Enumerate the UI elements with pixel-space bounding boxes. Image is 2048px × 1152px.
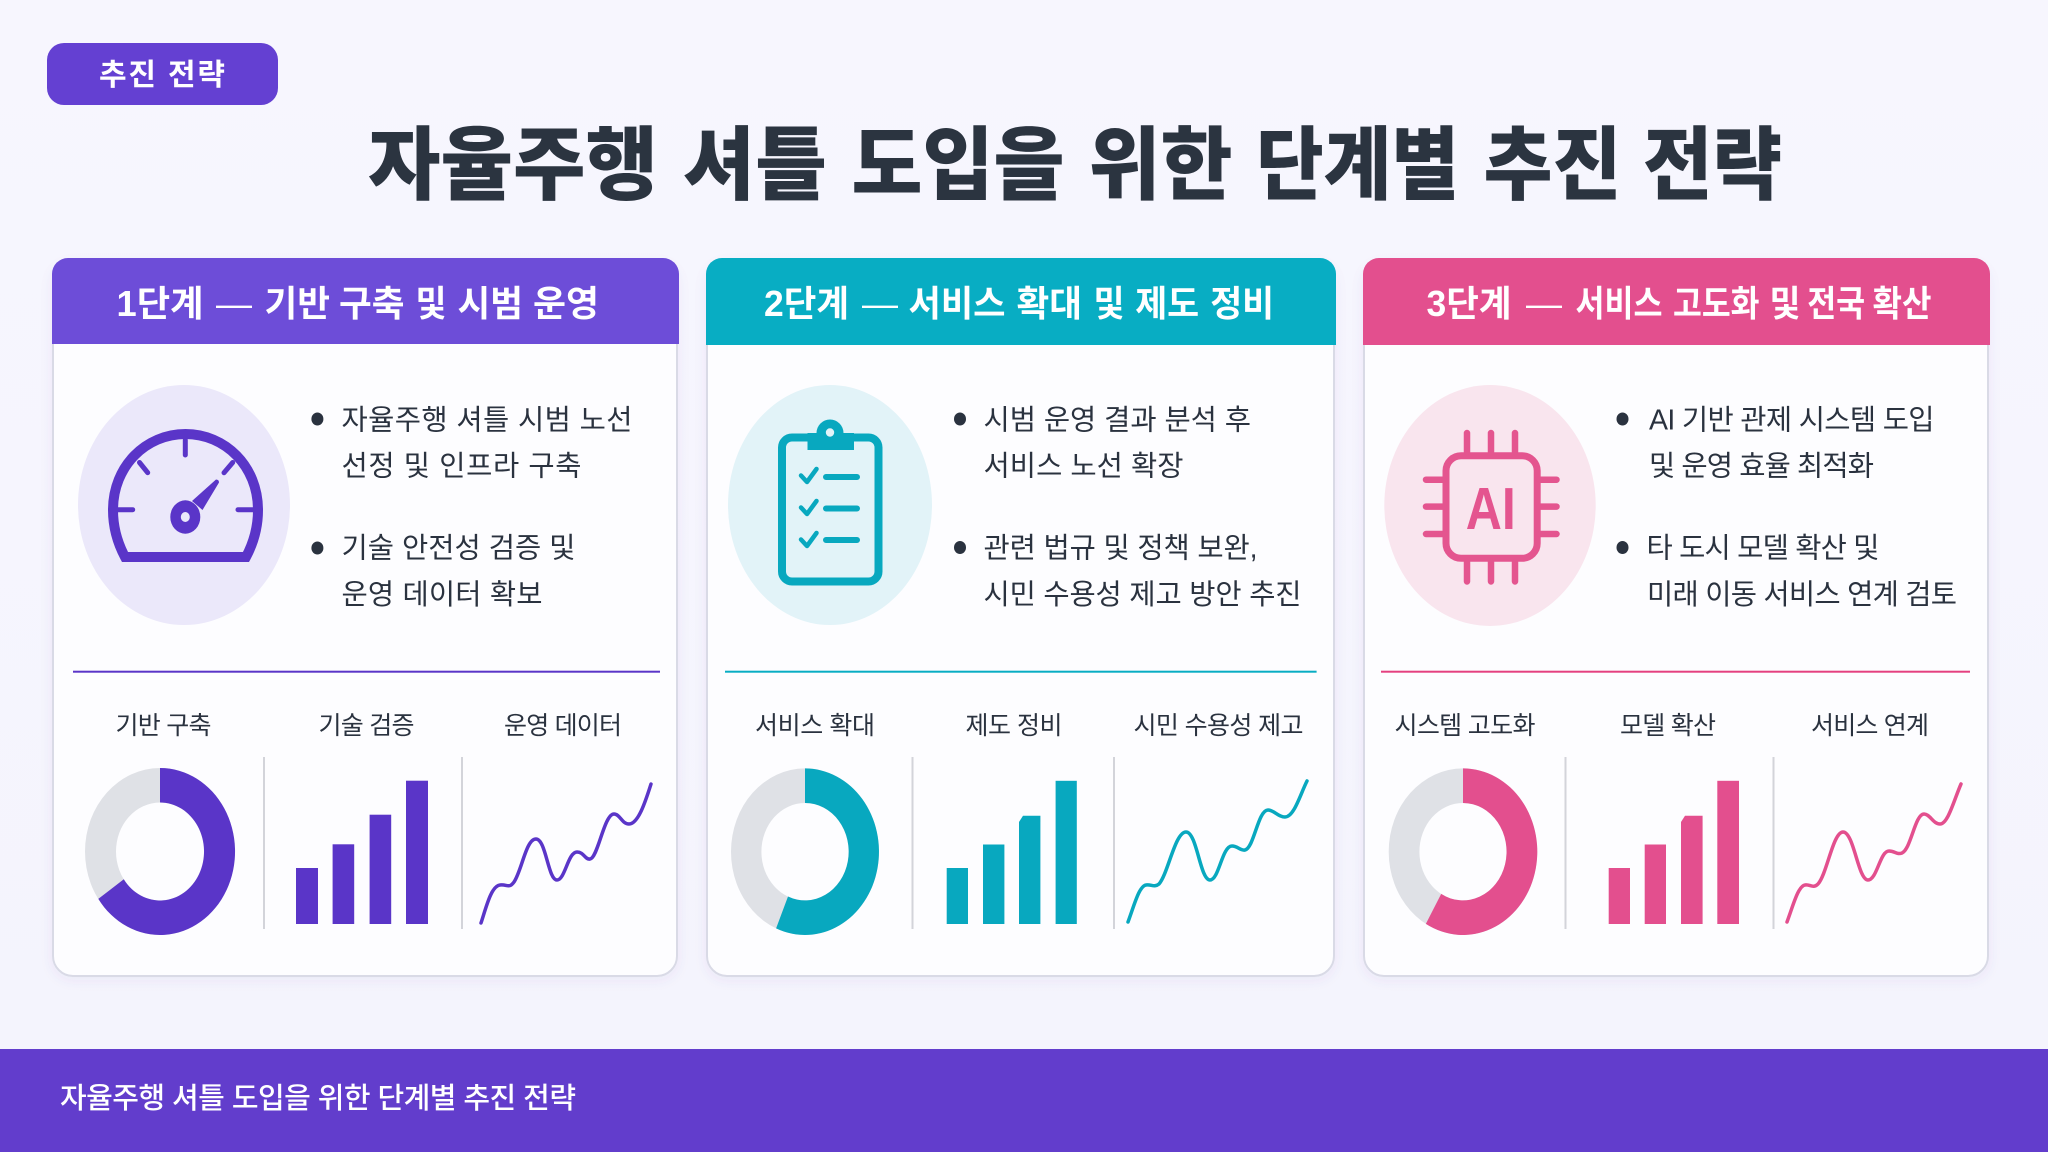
bar chart: 1단계	[296, 781, 428, 924]
chart labels: 2단계: 제도 정비	[966, 712, 1062, 740]
panel header: 2단계: 정비	[1210, 283, 1274, 324]
panel header: 2단계: —	[862, 283, 898, 324]
panel header: 3단계: 확산	[1872, 283, 1932, 324]
chart labels: 2단계: 서비스 확대	[755, 712, 875, 740]
line chart: 3단계	[1787, 784, 1961, 922]
panel header: 2단계: 서비스	[908, 283, 1006, 324]
panel header: 2단계: 확대	[1016, 283, 1082, 324]
panel: 1단계	[52, 258, 679, 976]
chart labels: 1단계: 기반 구축	[116, 712, 212, 740]
chart labels: 2단계	[755, 712, 1304, 740]
panel header: 3단계: 3단계	[1426, 283, 1512, 324]
line chart: 2단계	[1128, 781, 1307, 922]
bullets: 2단계: 시범 운영 결과 분석 후	[984, 404, 1251, 436]
badge: 추진 전략	[47, 43, 278, 105]
bullets: 1단계: 자율주행 셔틀 시범 노선	[342, 404, 632, 436]
bullets: 2단계: 서비스 노선 확장	[984, 450, 1184, 482]
bullets: 3단계: 타 도시 모델 확산 및	[1646, 532, 1880, 564]
panel header: 1단계: —	[216, 283, 252, 324]
bullets: 2단계	[954, 404, 1302, 611]
chart labels: 1단계: 기술 검증	[318, 712, 414, 740]
bullets: 3단계: 미래 이동 서비스 연계 검토	[1647, 579, 1957, 611]
chart labels: 3단계: 서비스 연계	[1811, 712, 1929, 740]
panel header: 2단계: 2단계	[764, 283, 849, 324]
icon: speedometer gauge	[78, 385, 290, 625]
panel: 2단계	[706, 258, 1336, 976]
panel header: 2단계	[706, 258, 1336, 345]
title	[368, 121, 1782, 210]
chart labels: 1단계	[116, 712, 622, 740]
panel header: 2단계: 제도	[1135, 283, 1199, 324]
chart labels: 1단계: 운영 데이터	[504, 712, 622, 740]
panel header: 3단계: 서비스	[1576, 283, 1662, 324]
bar chart: 2단계	[947, 781, 1077, 924]
icon: AI chip: AI	[1466, 476, 1516, 542]
bullets: 1단계: 운영 데이터 확보	[342, 579, 542, 611]
icon: clipboard checklist	[728, 385, 932, 625]
bar chart: 3단계	[1609, 781, 1739, 924]
bullets: 2단계: 관련 법규 및 정책 보완,	[984, 532, 1258, 564]
bullets: 1단계: 선정 및 인프라 구축	[342, 450, 582, 482]
panel: 3단계	[1363, 258, 1990, 976]
panel header: 1단계: 기반	[264, 283, 330, 324]
donut chart: 2단계	[731, 768, 879, 935]
chart labels: 2단계: 시민 수용성 제고	[1134, 712, 1304, 740]
title: 추진	[1484, 121, 1622, 210]
title: 단계별	[1256, 121, 1459, 210]
panel header: 3단계	[1363, 258, 1990, 345]
chart labels: 3단계	[1394, 712, 1929, 740]
title: 셔틀	[683, 121, 827, 210]
chart labels: 3단계: 시스템 고도화	[1394, 712, 1536, 740]
panel header: 1단계: 시범	[458, 283, 523, 324]
badge: 추진 전략: 추진 전략	[99, 59, 225, 92]
bullets: 3단계: 및 운영 효율 최적화	[1649, 450, 1874, 482]
donut chart: 1단계	[85, 768, 235, 935]
bullets: 2단계: 시민 수용성 제고 방안 추진	[984, 579, 1302, 611]
panel header: 1단계	[52, 258, 679, 344]
bullets: 3단계	[1616, 404, 1957, 611]
chart labels: 3단계: 모델 확산	[1620, 712, 1716, 740]
title: 위한	[1088, 121, 1232, 210]
icon: AI chip	[1384, 385, 1596, 626]
title: 전략	[1643, 121, 1782, 210]
title: 도입을	[852, 121, 1064, 210]
bullets: 3단계: AI 기반 관제 시스템 도입	[1649, 404, 1934, 436]
panel header: 3단계: —	[1526, 283, 1562, 324]
panel header: 3단계: 및	[1770, 283, 1800, 324]
panel header: 1단계: 운영	[533, 283, 599, 324]
title: 자율주행	[368, 121, 658, 210]
panel header: 1단계: 1단계	[116, 283, 204, 324]
bullets: 1단계	[311, 404, 632, 611]
panel header: 1단계: 및	[416, 283, 446, 324]
bullets: 1단계: 기술 안전성 검증 및	[342, 532, 576, 564]
panel header: 3단계: 전국	[1807, 283, 1865, 324]
panel header: 1단계: 구축	[339, 283, 404, 324]
line chart: 1단계	[481, 784, 651, 923]
footer bar: 자율주행 셔틀 도입을 위한 단계별 추진 전략	[60, 1082, 576, 1115]
donut chart: 3단계	[1389, 768, 1537, 935]
footer bar	[0, 1049, 2048, 1152]
panel header: 2단계: 및	[1094, 283, 1124, 324]
panel header: 3단계: 고도화	[1673, 283, 1760, 324]
